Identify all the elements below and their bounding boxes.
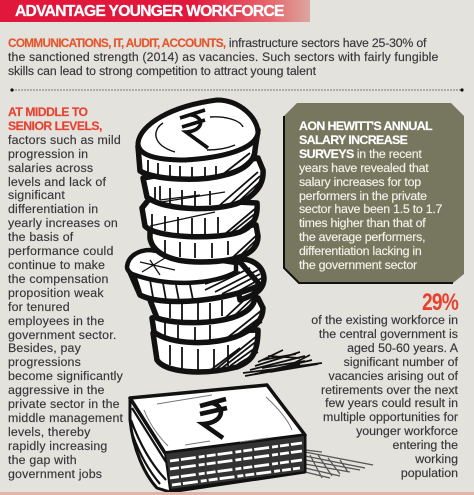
intro text block: COMMUNICATIONS, IT, AUDIT, ACCOUNTS, infrastructure sectors have 25-30% of	[8, 36, 426, 50]
left text block: continue to make	[8, 258, 105, 272]
left text block: performance could	[8, 244, 114, 258]
icon: coin stack	[127, 100, 264, 372]
left text block: rapidly increasing	[8, 439, 107, 453]
callout text: SURVEYS in the recent	[299, 147, 422, 161]
right text block: working	[415, 452, 458, 466]
title text: ADVANTAGE YOUNGER WORKFORCE	[15, 3, 284, 20]
left text block: SENIOR LEVELS,	[8, 119, 102, 133]
right text block: of the existing workforce in	[311, 313, 458, 327]
bottom border	[0, 492, 474, 495]
left text block: progressions	[8, 355, 81, 369]
left text block: progression in	[8, 147, 88, 161]
callout text: salary increases for top	[299, 175, 421, 189]
left text block: significant	[8, 188, 65, 202]
left text block: yearly increases on	[8, 216, 118, 230]
callout text	[299, 119, 442, 272]
icon: rupee on note	[200, 399, 227, 438]
right text block: the central government is	[319, 327, 458, 341]
left text block: salaries across	[8, 161, 93, 175]
note ground shadow	[305, 450, 373, 478]
intro text block: the sanctioned strength (2014) as vacancies. Such sectors with fairly fungible	[8, 50, 439, 64]
coin face rings	[156, 117, 243, 152]
title banner	[0, 0, 310, 22]
left text block: Besides, pay	[8, 341, 81, 355]
left text block: AT MIDDLE TO	[8, 105, 88, 119]
right text block: significant number of	[344, 355, 458, 369]
note edge hatching	[131, 408, 302, 485]
callout text: differentiation lacking in	[299, 244, 422, 258]
left text block: employees in the	[8, 314, 104, 328]
right text block: multiple opportunities for	[323, 410, 458, 424]
left text block: levels, thereby	[8, 425, 90, 439]
coin edge ridges	[136, 160, 228, 372]
callout text: years have revealed that	[299, 161, 428, 175]
left text block	[8, 105, 123, 481]
right text block: entering the	[393, 438, 458, 452]
left text block: factors such as mild	[8, 133, 121, 147]
intro text block: skills can lead to strong competition to attract young talent	[8, 64, 316, 78]
right text block	[311, 313, 458, 480]
callout text: the government sector	[299, 258, 417, 272]
coin ground shadow	[243, 350, 322, 376]
coin shading hatch	[140, 153, 262, 372]
dotted divider	[10, 88, 464, 92]
right text block: aged 50-60 years. A	[347, 341, 458, 355]
right text block: vacancies arising out of	[328, 369, 458, 383]
left text block: levels and lack of	[8, 175, 106, 189]
left text block: aggressive in the	[8, 383, 105, 397]
left text block: government jobs	[8, 467, 102, 481]
left text block: government sector.	[8, 328, 116, 342]
callout text: AON HEWITT'S ANNUAL	[299, 119, 432, 133]
left text block: middle management	[8, 411, 123, 425]
left text block: differentiation in	[8, 202, 98, 216]
right text block: younger workforce	[356, 424, 458, 438]
callout text: SALARY INCREASE	[299, 133, 407, 147]
callout text: the average performers,	[299, 230, 425, 244]
icon: rupee on coin	[180, 110, 208, 148]
callout text: times higher than that of	[299, 216, 425, 230]
callout text: sector have been 1.5 to 1.7	[299, 202, 442, 216]
left text block: become significantly	[8, 369, 123, 383]
statistic: 29%: 29%	[422, 289, 458, 316]
right text block: population	[401, 466, 458, 480]
left text block: private sector in the	[8, 397, 120, 411]
intro text block	[8, 36, 439, 78]
panel: Aon Hewitt callout	[283, 103, 464, 284]
left text block: for tenured	[8, 300, 70, 314]
left text block: the gap with	[8, 453, 77, 467]
right text block: retirements over the next	[321, 383, 458, 397]
left text block: the basis of	[8, 230, 73, 244]
left text block: the compensation	[8, 272, 109, 286]
icon: note bundle	[130, 385, 305, 492]
left text block: proposition weak	[8, 286, 104, 300]
callout text: performers in the private	[299, 189, 427, 203]
right text block: few years could result in	[325, 396, 458, 410]
